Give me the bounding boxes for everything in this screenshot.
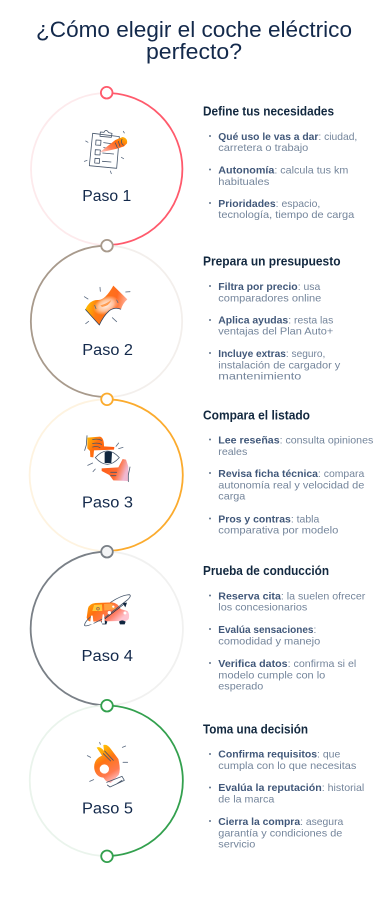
bullet list: conducción: Evalúa sensaciones:: [218, 625, 316, 636]
bullet list: presupuesto: ventajas del Plan Auto+: [218, 326, 333, 338]
bullet list: presupuesto: Aplica ayudas: resta las: [218, 316, 333, 327]
text block: toma una decisión: [203, 722, 364, 851]
ring: paso 2: [31, 246, 182, 397]
text block: prueba de conducción: [203, 564, 366, 692]
text block: prepara un presupuesto: [203, 255, 341, 382]
label: paso 3: Paso 3: [82, 494, 133, 511]
bullet list: presupuesto: Incluye extras: seguro,: [218, 349, 325, 360]
bullet list: necesidades: Qué uso le vas a dar: ciudad,: [218, 132, 357, 143]
bullet list: decisión: [209, 750, 364, 851]
bullet list: presupuesto: [209, 282, 341, 382]
bullet list: listado: Pros y contras: tabla: [218, 514, 320, 525]
node: paso 5 top: [101, 700, 113, 712]
bullet list: decisión: de la marca: [218, 794, 275, 805]
bullet list: decisión: Confirma requisitos: que: [218, 750, 341, 761]
panel: paso 5: [30, 700, 183, 862]
bullet list: presupuesto: mantenimiento: [218, 372, 302, 382]
heading: toma una decisión: Toma una decisión: [203, 722, 308, 736]
bullet list: listado: autonomía real y velocidad de: [218, 480, 365, 491]
icon: OK hand: [87, 742, 128, 787]
bullet list: decisión: garantía y condiciones de: [218, 828, 343, 839]
heading: prueba de conducción: Prueba de conducción: [203, 564, 329, 578]
bullet list: decisión: Cierra la compra: asegura: [218, 817, 344, 828]
heading: compara el listado: Compara el listado: [203, 408, 310, 422]
bullet list: presupuesto: Filtra por precio: usa: [218, 282, 321, 293]
bullet list: conducción: modelo cumple con lo: [218, 670, 326, 681]
node: paso 1: [101, 87, 112, 98]
icon: eye between hands: [85, 436, 130, 482]
title: ¿Cómo elegir el coche eléctrico: [36, 17, 352, 42]
ring: paso 3: [30, 399, 183, 551]
bullet list: conducción: Reserva cita: la suelen ofrecer: [218, 591, 366, 602]
title: [36, 17, 352, 64]
bullet list: decisión: Evalúa la reputación: historial: [218, 783, 364, 794]
bullet list: decisión: cumpla con lo que necesitas: [218, 761, 356, 772]
node: paso 2: [101, 240, 113, 252]
bullet list: presupuesto: comparadores online: [218, 294, 322, 305]
panel: paso 2: [31, 240, 182, 397]
label: paso 5: Paso 5: [82, 801, 133, 818]
bullet list: listado: reales: [218, 447, 247, 458]
bullet list: conducción: comodidad y manejo: [218, 636, 321, 647]
bullet list: listado: [209, 435, 373, 536]
ring: paso 4: [31, 552, 183, 705]
ring: paso 5: [30, 706, 183, 856]
bullet list: conducción: Verifica datos: confirma si el: [218, 659, 356, 670]
label: paso 4: Paso 4: [82, 648, 133, 665]
icon: banknote: [84, 286, 130, 325]
title: perfecto?: [146, 39, 242, 64]
bullet list: decisión: servicio: [218, 840, 256, 851]
text block: define tus necesidades: [203, 104, 357, 221]
bullet list: conducción: los concesionarios: [218, 603, 307, 614]
node: paso 4: [101, 546, 113, 558]
panel: paso 1: [31, 87, 182, 245]
bullet list: necesidades: habituales: [218, 177, 269, 188]
bullet list: listado: Revisa ficha técnica: compara: [218, 469, 365, 480]
bullet list: presupuesto: instalación de cargador y: [218, 360, 341, 372]
bullet list: conducción: esperado: [218, 681, 264, 692]
bullet list: conducción: [209, 591, 366, 692]
bullet list: listado: Lee reseñas: consulta opiniones: [218, 435, 373, 446]
bullet list: necesidades: Autonomía: calcula tus km: [218, 166, 348, 176]
bullet list: listado: carga: [218, 492, 246, 503]
bullet list: necesidades: Prioridades: espacio,: [218, 199, 320, 210]
icon: clipboard and pencil: [84, 130, 127, 174]
bullet list: necesidades: tecnología, tiempo de carga: [218, 210, 355, 221]
panel: paso 4: [31, 546, 183, 705]
bullet list: listado: comparativa por modelo: [218, 525, 339, 536]
panel: paso 3: [30, 394, 183, 551]
node: paso 3: [101, 394, 113, 405]
bullet list: necesidades: carretera o trabajo: [218, 143, 309, 154]
bullet list: necesidades: [209, 132, 357, 221]
text block: compara el listado: [203, 408, 373, 536]
heading: prepara un presupuesto: Prepara un presupuesto: [203, 255, 341, 269]
heading: define tus necesidades: Define tus necesidades: [203, 104, 334, 118]
label: paso 1: Paso 1: [82, 188, 131, 205]
node: paso 5 bottom: [101, 850, 113, 862]
label: paso 2: Paso 2: [82, 342, 133, 359]
ring: paso 1: [31, 93, 182, 245]
icon: car with orbit: [85, 595, 130, 626]
